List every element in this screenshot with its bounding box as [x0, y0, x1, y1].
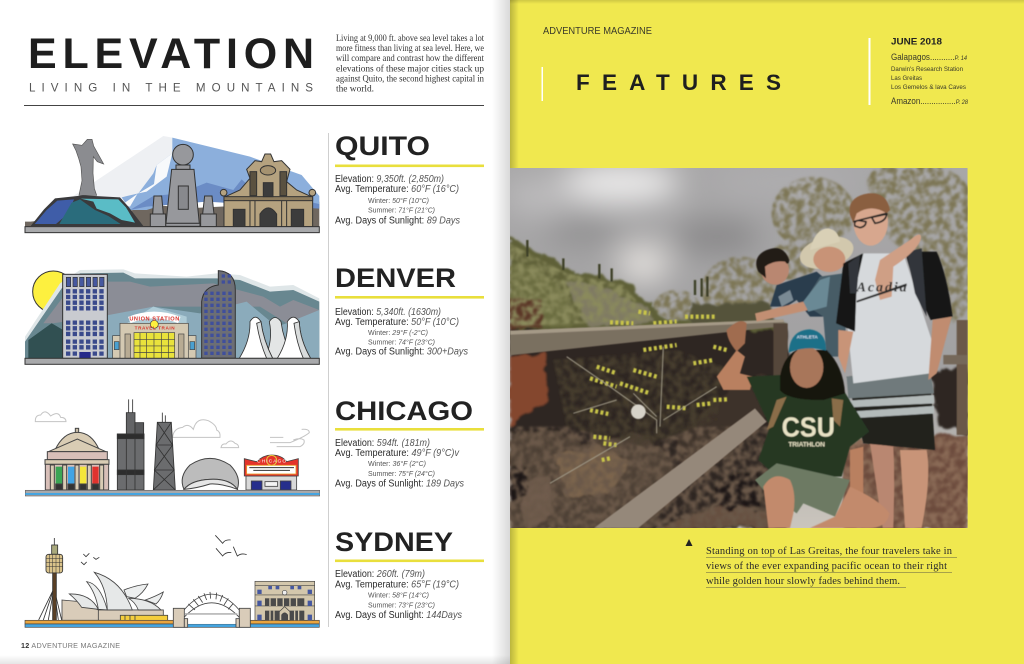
- heading: Denver: DENVER: [335, 263, 456, 293]
- illustration: Denver skyline: TRAVEL TRAIN: [135, 326, 175, 331]
- illustration: Quito skyline: [25, 136, 319, 233]
- Chicago Theatre: [244, 455, 298, 490]
- panel: Quito stats: Summer: 71°F (21°C): [368, 207, 435, 215]
- Quito hill: [31, 195, 143, 226]
- intro paragraph: against Quito, the second highest capital in: [336, 75, 484, 85]
- Quito statue: [73, 139, 104, 195]
- illustration: Denver skyline: [25, 269, 319, 364]
- caption: Standing on top of Las Greitas, the four travelers take in: [706, 546, 953, 557]
- panel: Denver stats: Elevation: 5,340ft. (1630m): [335, 307, 441, 318]
- Chicago museum: [45, 428, 109, 490]
- illustration: Denver skyline: UNION STATION: [129, 317, 179, 323]
- table of contents: Amazon................P. 28: [891, 96, 968, 106]
- heading: Quito: QUITO: [335, 131, 430, 161]
- panel: Chicago stats: Avg. Days of Sunlight: 189 Days: [335, 479, 464, 490]
- panel: Sydney stats: Avg. Temperature: 65°F (19°C): [335, 580, 459, 591]
- panel: Denver stats: Winter: 29°F (-2°C): [368, 329, 428, 337]
- panel: Denver stats: Avg. Days of Sunlight: 300+Days: [335, 346, 468, 357]
- table of contents: Galapagos...........P. 14: [891, 52, 967, 62]
- Chicago Willis Tower: [117, 399, 144, 490]
- heading: Chicago: CHICAGO: [335, 396, 473, 426]
- panel: Denver stats: Avg. Temperature: 50°F (10°C): [335, 317, 459, 328]
- Chicago Cloud Gate: [182, 458, 238, 489]
- panel: Chicago stats: [335, 396, 484, 490]
- trees behind: [653, 165, 975, 323]
- Quito monument: [150, 144, 216, 227]
- intro paragraph: more fitness than living at sea level. Here, we: [336, 43, 484, 54]
- yellow leaves: [590, 312, 728, 460]
- Chicago clouds: [35, 412, 309, 448]
- illustration: Chicago skyline: CHICAGO: [257, 458, 286, 464]
- front traveler in blue cap: [717, 350, 753, 390]
- traveler in sun hat: [811, 273, 846, 358]
- rock and shrub texture: [510, 243, 968, 528]
- caption: [706, 546, 957, 588]
- panel: Quito stats: [335, 131, 484, 226]
- caption: while golden hour slowly fades behind them.: [706, 576, 900, 587]
- panel: Quito stats: Avg. Temperature: 60°F (16°C): [335, 184, 459, 195]
- tall traveler: [900, 450, 928, 528]
- panel: Chicago stats: Avg. Temperature: 49°F (9°C)v: [335, 448, 460, 459]
- hillside left: [510, 237, 787, 337]
- intro paragraph: Living at 9,000 ft. above sea level takes a lot: [336, 33, 484, 44]
- panel: Chicago stats: Summer: 75°F (24°C): [368, 470, 435, 478]
- intro paragraph: the world.: [336, 85, 374, 95]
- Sydney birds: [81, 535, 247, 565]
- photo: four travelers at Las Grietas: Acadia: [856, 281, 907, 296]
- cacti: [527, 240, 707, 297]
- panel: Chicago stats: Winter: 36°F (2°C): [368, 460, 426, 468]
- photo: four travelers at Las Grietas: TRIATHLON: [788, 442, 825, 449]
- table of contents: [891, 36, 968, 106]
- Sydney Harbour Bridge: [173, 592, 250, 627]
- intro paragraph: elevations of these major cities stack up: [336, 64, 484, 75]
- photo: four travelers at Las Grietas: CSU: [782, 412, 835, 443]
- panel: Denver stats: [335, 263, 484, 357]
- right page background: [510, 0, 1024, 664]
- Quito base: [25, 227, 319, 233]
- Chicago Hancock Tower: [153, 413, 175, 490]
- Quito church: [220, 154, 316, 227]
- illustration: Sydney skyline: [25, 535, 319, 627]
- magazine name: ADVENTURE MAGAZINE: [543, 26, 652, 37]
- rock wall: [510, 330, 787, 530]
- Denver Union Station: [113, 320, 196, 358]
- subtitle: LIVING IN THE MOUNTAINS: [29, 82, 313, 94]
- panel: Sydney stats: Summer: 73°F (23°C): [368, 602, 435, 610]
- panel: Denver stats: Summer: 74°F (23°C): [368, 338, 435, 346]
- table of contents: Darwin's Research Station: [891, 66, 964, 73]
- title: Elevation: ELEVATION: [28, 30, 314, 78]
- heading: Sydney: SYDNEY: [335, 527, 453, 557]
- panel: Sydney stats: Winter: 58°F (14°C): [368, 592, 429, 600]
- Sydney Opera House: [62, 572, 168, 621]
- panel: Sydney stats: Elevation: 260ft. (79m): [335, 569, 425, 580]
- left page background: [0, 0, 510, 664]
- intro paragraph: [336, 33, 484, 95]
- panel: Sydney stats: [335, 527, 484, 621]
- page footer: 12 ADVENTURE MAGAZINE: [21, 641, 120, 650]
- panel: Quito stats: Avg. Days of Sunlight: 89 Days: [335, 215, 460, 226]
- photo: four travelers at Las Grietas: ATHLETA: [797, 334, 818, 339]
- Denver airport tents: [239, 317, 311, 358]
- Chicago base: [25, 490, 320, 496]
- intro paragraph: will compare and contrast how the different: [336, 53, 484, 64]
- clouds: [510, 168, 758, 296]
- Sydney historic building: [255, 581, 315, 620]
- Sydney ground and water: [25, 613, 319, 627]
- wooden fence: [510, 319, 785, 355]
- panel: Chicago stats: Elevation: 594ft. (181m): [335, 438, 430, 449]
- Sydney Tower: [39, 538, 63, 620]
- panel: Quito stats: Winter: 50°F (10°C): [368, 197, 429, 205]
- caption: views of the ever expanding pacific ocean to their right: [706, 561, 947, 572]
- table of contents: JUNE 2018: [891, 36, 943, 48]
- Denver base: [25, 358, 319, 364]
- illustration: Chicago skyline: [25, 399, 320, 496]
- caption marker triangle: [686, 539, 692, 546]
- Denver sun: [33, 271, 74, 312]
- Denver office tower: [63, 274, 107, 358]
- panel: Sydney stats: Avg. Days of Sunlight: 144Days: [335, 610, 462, 621]
- curly haired traveler: [770, 272, 827, 317]
- panel: Quito stats: Elevation: 9,350ft. (2,850m): [335, 174, 444, 185]
- heading: Features: FEATURES: [576, 70, 781, 95]
- table of contents: Las Greitas: [891, 75, 922, 82]
- table of contents: Los Gemelos & lava Caves: [891, 84, 966, 91]
- Denver curved tower: [202, 271, 235, 358]
- photo: four travelers at Las Grietas: [503, 163, 975, 530]
